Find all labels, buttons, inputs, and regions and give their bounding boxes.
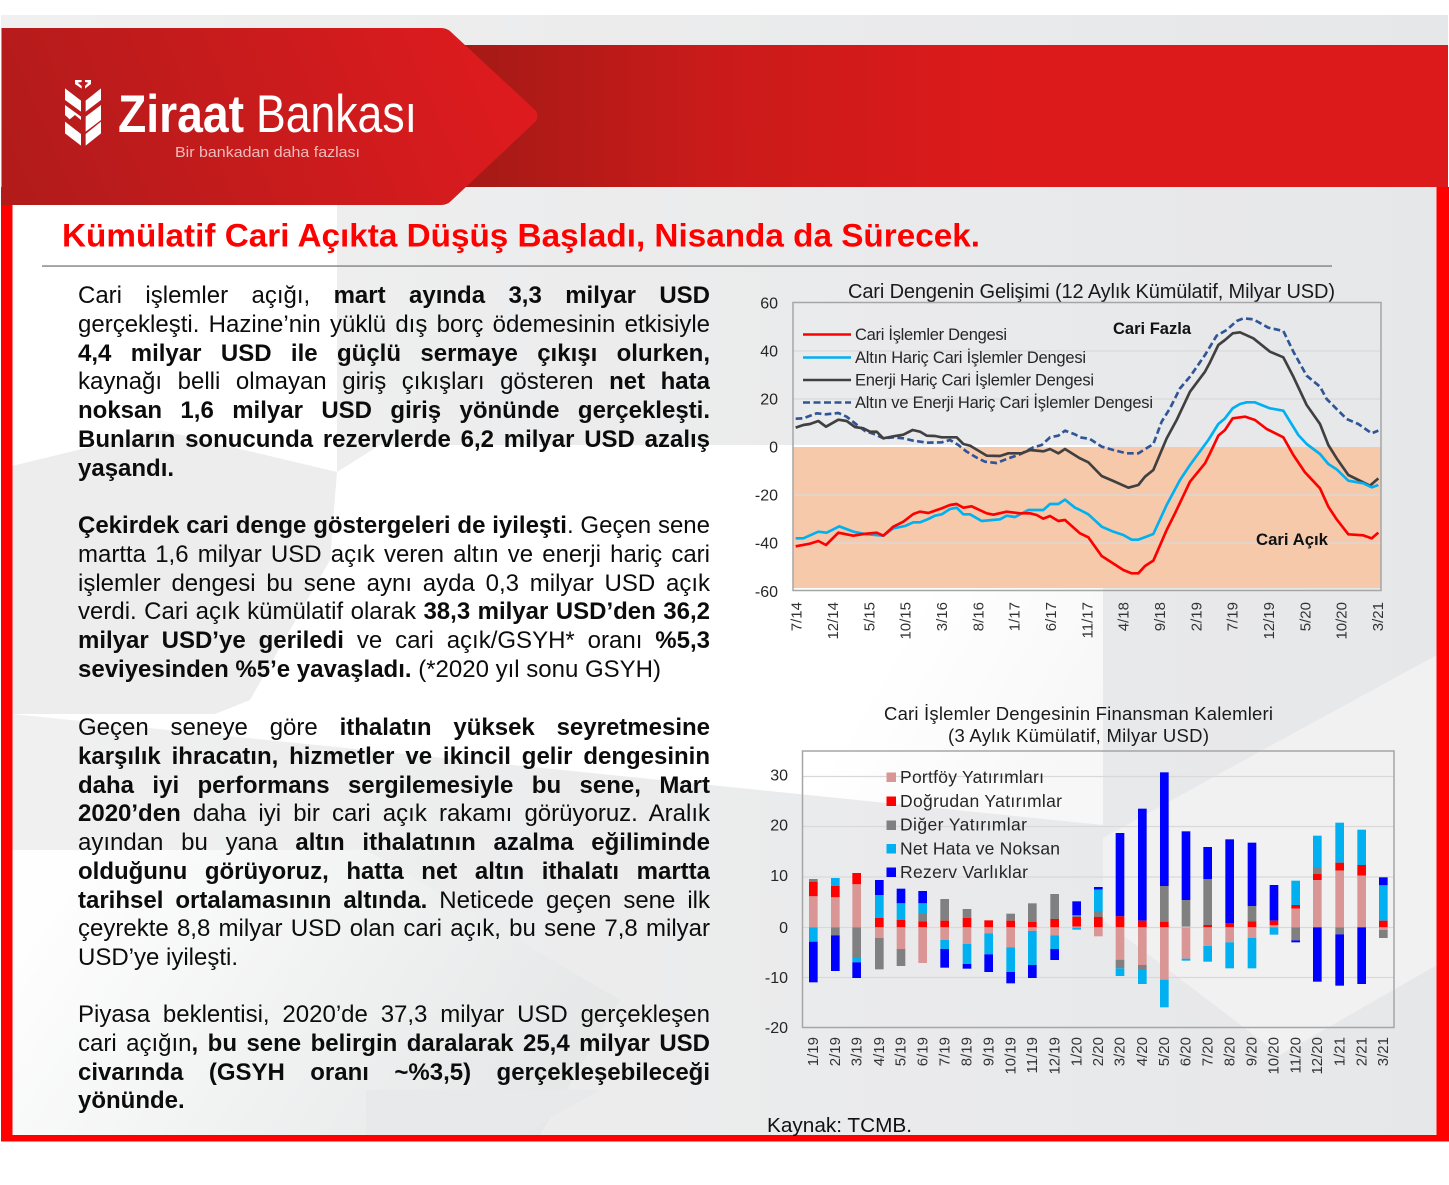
chart 1 legend: Cari İşlemler Dengesi — [855, 325, 1007, 344]
chart: current account balance lines — [755, 281, 1387, 640]
text block: paragraph 2: martta 1,6 milyar USD açık veren altın ve enerji hariç cari — [78, 541, 710, 568]
text block: paragraph 2: verdi. Cari açık kümülatif olarak 38,3 milyar USD’den 36,2 — [78, 598, 710, 625]
chart 2 x axis: 2/21 — [1353, 1037, 1370, 1066]
chart 1 x axis: 7/14 — [788, 602, 805, 631]
chart 2 x axis: 9/20 — [1244, 1037, 1261, 1066]
chart 2 x axis: 7/20 — [1199, 1037, 1216, 1066]
chart 1 x axis: 7/19 — [1225, 602, 1242, 631]
chart 1 x axis: 2/19 — [1188, 602, 1205, 631]
text block: paragraph 1 — [78, 282, 710, 482]
chart 2 x axis — [805, 1037, 1392, 1075]
text block: paragraph 3: karşılık ihracatın, hizmetler ve ikincil gelir dengesinin — [78, 743, 710, 770]
text block: paragraph 2: seviyesinden %5’e yavaşladı. (*2020 yıl sonu GSYH) — [78, 656, 661, 683]
chart 1 title: Cari Dengenin Gelişimi (12 Aylık Kümülatif, Milyar USD) — [848, 281, 1335, 303]
chart 1 x axis: 3/21 — [1370, 602, 1387, 631]
chart 2 x axis: 7/19 — [936, 1037, 953, 1066]
chart 1 x axis: 9/18 — [1152, 602, 1169, 631]
chart 2 y axis: 30 — [770, 768, 788, 784]
text block: paragraph 4 — [78, 1001, 710, 1114]
chart 1 legend: Altın Hariç Cari İşlemler Dengesi — [855, 348, 1086, 367]
chart 1 y axis — [755, 296, 778, 601]
chart 2 x axis: 3/20 — [1112, 1037, 1129, 1066]
text block: paragraph 3: çeyrekte 8,8 milyar USD olan cari açık, bu sene 7,8 milyar — [78, 915, 710, 942]
text block: paragraph 1: Bunların sonucunda rezervlerde 6,2 milyar USD azalış — [78, 426, 710, 453]
chart 2 y axis: 20 — [770, 818, 788, 834]
chart 2 x axis: 12/20 — [1309, 1037, 1326, 1075]
text block: paragraph 1: noksan 1,6 milyar USD giriş yönünde gerçekleşti. — [78, 397, 710, 424]
text block: paragraph 3: olduğunu görüyoruz, hatta net altın ithalatı martta — [78, 858, 710, 885]
chart 1 y axis: 40 — [760, 344, 778, 360]
text block: paragraph 2: işlemler dengesi bu sene aynı ayda 0,3 milyar USD açık — [78, 570, 710, 596]
chart 2 x axis: 1/20 — [1068, 1037, 1085, 1066]
chart 2 y axis: -20 — [765, 1020, 788, 1037]
chart 1 y axis: 0 — [769, 440, 778, 456]
text block: paragraph 2: Çekirdek cari denge göstergeleri de iyileşti. Geçen sene — [78, 512, 710, 539]
chart 2 y axis: -10 — [765, 970, 788, 987]
logo wordmark: Bankası — [256, 85, 417, 144]
label: deficit: Cari Açık — [1256, 531, 1329, 549]
text block: paragraph 3: ayından bu yana altın ithalatının azalma eğiliminde — [78, 829, 710, 856]
text block: paragraph 1: Cari işlemler açığı, mart ayında 3,3 milyar USD — [78, 282, 710, 309]
chart 2 legend: Net Hata ve Noksan — [900, 838, 1060, 858]
title: Kümülatif Cari Açıkta Düşüş Başladı, Nisanda da Sürecek. — [62, 218, 980, 254]
chart 2 bars — [809, 772, 1388, 1007]
chart 2 x axis: 5/19 — [893, 1037, 910, 1066]
chart 1 y axis: -40 — [755, 536, 778, 552]
chart 1 x axis: 6/17 — [1043, 602, 1060, 631]
text block: paragraph 2: milyar USD’ye geriledi ve cari açık/GSYH* oranı %5,3 — [78, 627, 710, 654]
chart 2 title: Cari İşlemler Dengesinin Finansman Kalemleri — [884, 703, 1273, 724]
text block: paragraph 2 — [78, 512, 710, 683]
chart 1 x axis: 4/18 — [1116, 602, 1133, 631]
chart 2 x axis: 2/19 — [827, 1037, 844, 1066]
chart 2 x axis: 3/19 — [848, 1037, 865, 1066]
logo arrow panel — [2, 28, 538, 205]
icon: wheat logo — [65, 80, 101, 146]
text block: paragraph 1: kaynağı belli olmayan giriş çıkışları gösteren net hata — [78, 368, 710, 395]
chart 2 y axis: 0 — [779, 920, 788, 937]
text block: paragraph 3 — [78, 714, 710, 971]
chart 1 x axis: 1/17 — [1007, 602, 1024, 631]
chart 2 x axis: 4/20 — [1134, 1037, 1151, 1066]
chart 1 y axis: -20 — [755, 488, 778, 504]
text block: paragraph 3: daha iyi performans sergilemesiyle bu sene, Mart — [78, 772, 710, 798]
chart 2 title — [884, 703, 1273, 746]
chart 1 x axis — [788, 602, 1387, 640]
chart 2 x axis: 8/19 — [959, 1037, 976, 1066]
chart 1 y axis: 20 — [760, 392, 778, 408]
text block: paragraph 1: 4,4 milyar USD ile güçlü sermaye çıkışı olurken, — [78, 340, 710, 366]
chart 2 x axis: 9/19 — [980, 1037, 997, 1066]
text block: paragraph 3: 2020’den daha iyi bir cari açık rakamı görüyoruz. Aralık — [78, 800, 710, 827]
text block: paragraph 1: gerçekleşti. Hazine’nin yüklü dış borç ödemesinin etkisiyle — [78, 311, 710, 338]
chart 2 x axis: 2/20 — [1090, 1037, 1107, 1066]
chart 2 y axis: 10 — [770, 868, 788, 885]
text block: paragraph 4: yönünde. — [78, 1087, 185, 1114]
chart 1 x axis: 3/16 — [934, 602, 951, 631]
text block: paragraph 4: cari açığın, bu sene belirgin daralarak 25,4 milyar USD — [78, 1030, 710, 1057]
chart 1 x axis: 8/16 — [970, 602, 987, 631]
chart 1 y axis: -60 — [755, 584, 778, 601]
chart 2 legend: Rezerv Varlıklar — [900, 862, 1028, 882]
text block: paragraph 3: USD’ye iyileşti. — [78, 944, 238, 971]
chart 2 x axis: 11/20 — [1287, 1037, 1304, 1073]
chart 1 x axis: 5/15 — [861, 602, 878, 631]
header band — [440, 45, 1448, 187]
chart 1 x axis: 12/14 — [825, 602, 842, 640]
text block: paragraph 3: Geçen seneye göre ithalatın yüksek seyretmesine — [78, 714, 710, 741]
source note: Kaynak: TCMB. — [767, 1115, 912, 1137]
logo tagline: Bir bankadan daha fazlası — [175, 145, 360, 161]
text block: paragraph 3: tarihsel ortalamasının altında. Neticede geçen sene ilk — [78, 886, 710, 914]
chart 1 x axis: 10/15 — [898, 602, 915, 640]
chart 1 y axis: 60 — [760, 296, 778, 312]
chart 1 x axis: 12/19 — [1261, 602, 1278, 640]
chart 2 x axis: 10/19 — [1002, 1037, 1019, 1075]
chart 1 legend: Enerji Hariç Cari İşlemler Dengesi — [855, 370, 1094, 390]
chart 2 x axis: 6/19 — [914, 1037, 931, 1066]
chart 1 x axis: 11/17 — [1079, 602, 1096, 638]
chart 2 legend: Doğrudan Yatırımlar — [900, 791, 1062, 811]
chart 2 x axis: 6/20 — [1178, 1037, 1195, 1066]
chart 1 x axis: 10/20 — [1334, 602, 1351, 640]
chart 2 x axis: 3/21 — [1375, 1037, 1392, 1066]
chart 2 x axis: 8/20 — [1221, 1037, 1238, 1066]
chart 1 legend: Altın ve Enerji Hariç Cari İşlemler Dengesi — [855, 393, 1153, 412]
chart 2 x axis: 1/21 — [1331, 1037, 1348, 1066]
label: surplus: Cari Fazla — [1113, 320, 1192, 338]
chart: financing items stacked bars — [765, 703, 1394, 1075]
text block: paragraph 4: Piyasa beklentisi, 2020’de 37,3 milyar USD gerçekleşen — [78, 1001, 710, 1028]
logo wordmark — [118, 85, 417, 144]
chart 2 x axis: 1/19 — [805, 1037, 822, 1066]
chart 2 x axis: 5/20 — [1156, 1037, 1173, 1066]
chart 1 legend — [803, 325, 1153, 412]
chart 2 x axis: 10/20 — [1266, 1037, 1283, 1075]
chart 2 y axis — [765, 768, 788, 1037]
text block: paragraph 1: yaşandı. — [78, 454, 174, 482]
chart 2 x axis: 4/19 — [871, 1037, 888, 1066]
chart 2 x axis: 11/19 — [1024, 1037, 1041, 1073]
chart 1 data lines — [796, 318, 1378, 573]
logo wordmark: Ziraat — [118, 85, 244, 144]
chart 2 title: (3 Aylık Kümülatif, Milyar USD) — [948, 725, 1209, 746]
chart 2 x axis: 12/19 — [1046, 1037, 1063, 1075]
text block: paragraph 4: civarında (GSYH oranı ~%3,5) gerçekleşebileceği — [78, 1058, 710, 1086]
chart 1 x axis: 5/20 — [1297, 602, 1314, 631]
chart 2 legend — [886, 767, 1062, 882]
chart 2 legend: Diğer Yatırımlar — [900, 814, 1027, 834]
chart 2 legend: Portföy Yatırımları — [900, 767, 1044, 787]
